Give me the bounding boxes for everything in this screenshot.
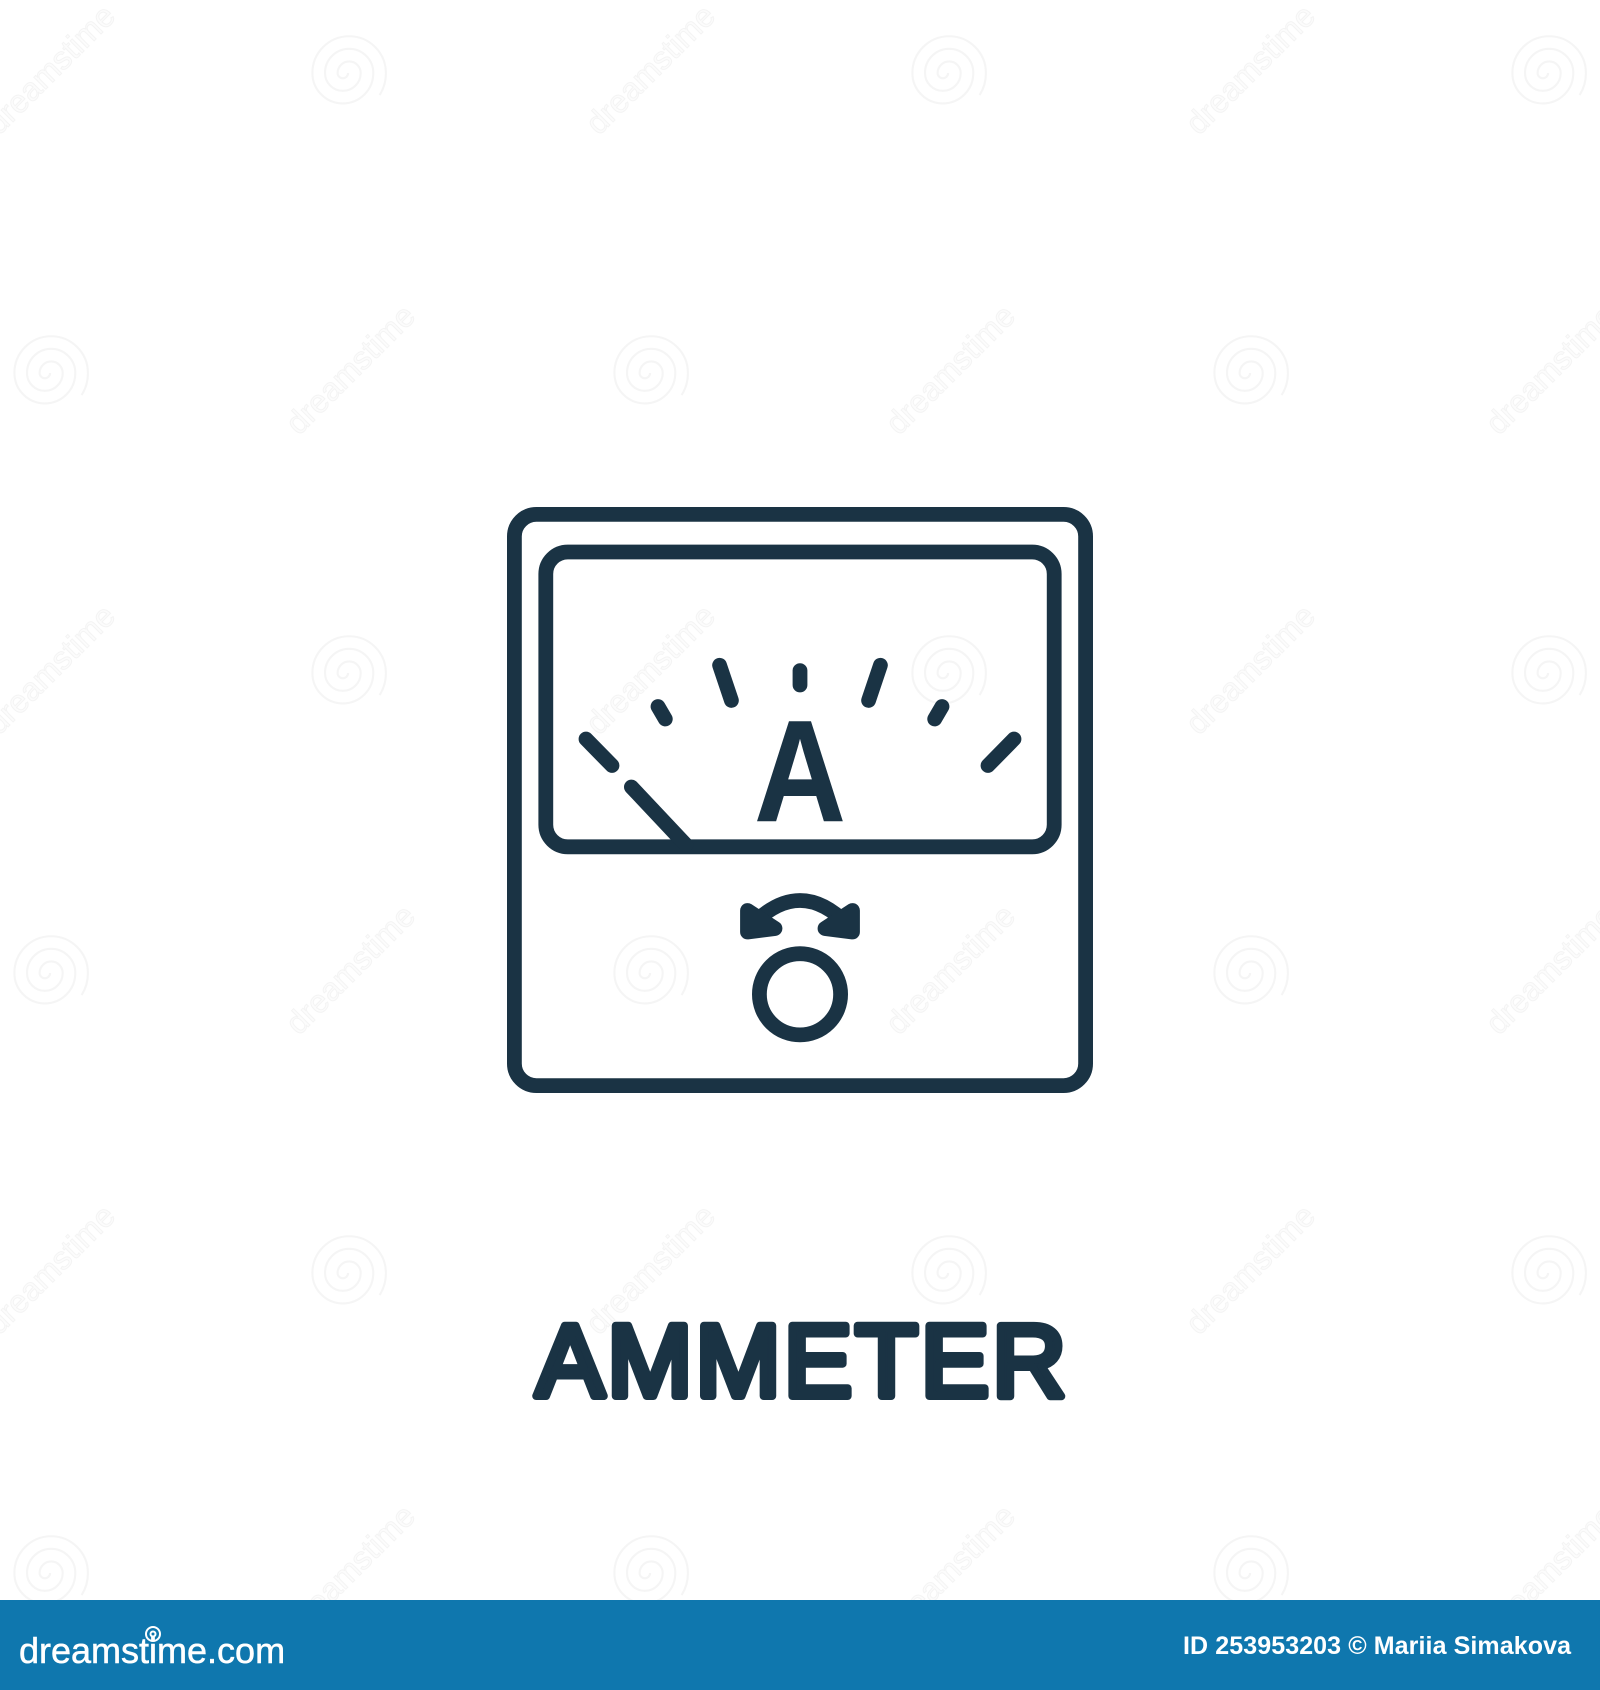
meter needle — [631, 787, 686, 845]
watermark pattern: dreamstime — [278, 897, 422, 1041]
watermark pattern: dreamstime — [878, 297, 1022, 441]
footer bar — [0, 1600, 1600, 1690]
watermark pattern: dreamstime — [1178, 1197, 1322, 1341]
watermark pattern: dreamstime — [278, 1497, 422, 1641]
image credit: ID 253953203 © Mariia Simakova — [1183, 1632, 1572, 1660]
watermark pattern: dreamstime — [1178, 0, 1322, 141]
adjustment knob — [759, 954, 841, 1035]
logo spiral — [146, 1627, 160, 1641]
watermark pattern: dreamstime — [578, 597, 722, 741]
adjustment arrows — [748, 900, 852, 932]
scale tick marks — [586, 665, 1014, 766]
watermark pattern: dreamstime — [878, 897, 1022, 1041]
title: AMMETER — [536, 1304, 1066, 1418]
unit letter A: A — [755, 691, 845, 852]
meter outer casing — [514, 514, 1086, 1086]
watermark pattern: dreamstime — [878, 1497, 1022, 1641]
icon: ammeter — [514, 514, 1086, 1086]
footer logo: dreamstime.com — [19, 1630, 285, 1671]
meter display window — [546, 552, 1054, 847]
watermark pattern: dreamstime — [578, 0, 722, 141]
watermark pattern: dreamstime — [578, 1197, 722, 1341]
watermark pattern: dreamstime — [278, 297, 422, 441]
watermark pattern: dreamstime — [1178, 597, 1322, 741]
